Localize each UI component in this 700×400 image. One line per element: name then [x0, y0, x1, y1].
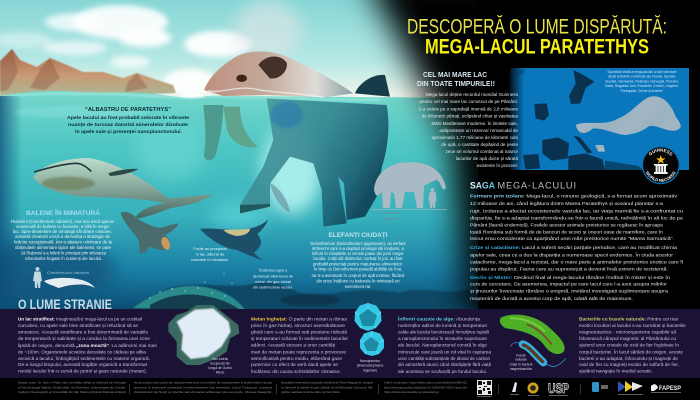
lake bed rocks: [133, 273, 480, 310]
text block: bacterii: bacterii s-au adaptat, înlocuindu-și magneții de: [579, 356, 678, 362]
text block: înfloriri: unor cantități substanțiale de dioxid de carbon: [398, 356, 490, 362]
illustration: magnetotactic bacteria: [500, 315, 566, 371]
text block: metan înghețat: gheții care s-au format sub presiune ridicată: [251, 330, 347, 336]
caption: methane release: din sedimentele lacului.: [253, 284, 293, 290]
mountains: [0, 49, 176, 97]
text block: cel mai mare lac: zece ori volumul combinat al tuturor: [445, 149, 518, 154]
text block: cel mai mare lac: CEL MAI MARE LAC: [423, 72, 487, 79]
text block: Balene în miniatură: nămolurilor bogate în nutrienți ale lacului.: [25, 256, 102, 261]
panel: strange world: [0, 309, 700, 378]
text block: Elefanți ciudați: eveniment rar.: [345, 284, 371, 289]
text block: metan înghețat: [250, 316, 348, 375]
callout: Albastru de Paratethys: [67, 107, 189, 135]
distant seal: [270, 183, 290, 213]
map note: [605, 70, 679, 93]
text block: Elefanți ciudați: Deinotherium (Deinotherium giganteum), un elefant: [310, 241, 406, 246]
text block: metan înghețat: adânci. Această stocare a unor cantități: [251, 343, 335, 349]
caption: seals: balenele în miniatură.: [191, 257, 229, 262]
dark fade to black: [362, 0, 700, 320]
footer credits: Despre autor: Dr. Dan V. Palcu este cercetător afiliat cu Institutul de Geologie: [18, 380, 126, 384]
text block: metan înghețat: mari de metan poate reprezenta o provocare: [251, 349, 346, 355]
text block: cel mai mare lac: existente în prezent.: [477, 163, 518, 168]
dark regions of the map: [569, 70, 594, 104]
text block: Elefanți ciudați: lacului. Colții săi distinctivi, curbați în jos, au fost: [313, 256, 403, 261]
heading: Saga mega-lacului: SAGA: [470, 180, 495, 190]
elephant head above water: [203, 51, 390, 97]
illustration: nanoplankton: Nanoplancton: [360, 359, 380, 363]
text block: Balene în miniatură: obișnuitele alimentare tipice ale balenelor, se pare: [15, 245, 112, 250]
map note: Italiei, Regatului Unit, României, Greciei, Ungariei,: [605, 84, 679, 88]
heading: O lume stranie: O LUME STRANIE: [18, 297, 112, 312]
caption: methane release: [253, 268, 293, 290]
text block: bacterii: exotici locuitori ai lacului s-au numărat și bacteriile: [579, 323, 686, 329]
illustration: nanoplankton: bigelowii): [363, 368, 377, 372]
callout: Albastru de Paratethys: “ALBASTRU DE PARATETHYS”: [85, 107, 171, 113]
text block: Elefanți ciudați: ELEFANȚI CIUDAȚI: [328, 233, 388, 239]
text block: metan înghețat: prins în gaz-hidrați, structuri asemănătoare: [251, 323, 345, 329]
text block: un lac stratificat: curcubeu, cu apele sale bine stratificate și refuzând să se: [18, 323, 138, 329]
scale comparison: human and small whale: [33, 267, 95, 288]
text block: cel mai mare lac: DIN TOATE TIMPURILE!!: [417, 81, 495, 88]
text block: Elefanți ciudați: din orice întâlnire cu balenele în miniatură un: [316, 278, 400, 284]
text block: Elefanți ciudați: [310, 233, 406, 289]
text block: un lac stratificat: nordul lacului într-o sursă de petrol și gaze naturale (metan).: [18, 368, 147, 374]
logos: partner institutions: FAPESP: [659, 385, 681, 392]
text block: Balene în miniatură: că Riabinini s-a hrănit în principal prin sifonarea: [21, 250, 107, 256]
text block: cel mai mare lac: Mega-lacul deține recordul mondial Guinness: [426, 92, 519, 97]
title: [407, 16, 667, 58]
image: gas hydrate: Mexic: [216, 370, 225, 374]
illustration: magnetotactic bacteria: (mai) în bacterii: [510, 362, 533, 366]
text block: un lac stratificat: [18, 316, 157, 374]
footer credits: grafice realizate la fel de către de Dan Palcu.: [281, 390, 341, 394]
text block: metan înghețat: încălzesc din cauza schimbărilor climatice.: [250, 369, 341, 375]
text block: un lac stratificat: de ~100m. Organismele acvatice decedate ce cădeau pe albia: [18, 349, 146, 355]
image: gas hydrate: [168, 305, 239, 374]
whale: [33, 158, 212, 219]
caption: seals: [191, 246, 229, 262]
QR code: [477, 380, 492, 397]
sky with clouds: [0, 0, 480, 100]
heading: Saga mega-lacului: MEGA-LACULUI: [498, 180, 576, 190]
badge: Guinness World Records: WORLD RECORDS: [646, 170, 676, 182]
text block: cel mai mare lac: S-a extins pe o suprafață imensă de 2,8 milioane: [418, 106, 518, 112]
text block: saga: populau au dispărut. Fauna care au supraviețuit a devenit însă extrem de rezistentă.: [470, 267, 668, 272]
text block: cel mai mare lac: pentru cel mai mare lac cunoscut de pe Pământ.: [419, 99, 518, 104]
caption: methane release: declanșat eliberarea de: [253, 274, 293, 278]
text block: bacterii: Bacteriile cu busole naturale: Printre cei mai: [579, 316, 678, 322]
text block: înfloriri: a nanoplanctonului în straturile superioare: [398, 336, 487, 342]
text block: cel mai mare lac: Mării Mediterane moderne. În limitele sale,: [431, 120, 518, 126]
text block: saga: rupt. Izolarea a afectat ecosistemele vastului lac, iar viața marină fie s-a confruntat cu: [470, 208, 683, 214]
callout: Albastru de Paratethys: Apele lacului au fost probabil colorate în vibrante: [67, 115, 189, 121]
scale comparison: Deinotherium and human: giganteum: [383, 217, 399, 221]
scale comparison: human and small whale: Cetotherium riabinini: [47, 271, 89, 275]
footer credits: anoxice în bazinele oceanice mediteraneene (de exemplu, Lacul Turkana), oceanul: [134, 386, 272, 390]
text block: saga: cataclisme, mega-lacul a rezistat, dar o mare parte a animalelor preistorice exotice care îl: [470, 260, 683, 265]
footer credits: cu balenele și rețelele de gaz utilizate de la Wikimedia Commons, Alte: [281, 386, 373, 390]
text block: saga: Crize și cataclisme: Lacul a suferit secări parțiale periodice, care au modificat chimia: [470, 245, 677, 251]
text block: un lac stratificat: anoxică a lacului, îmbogățind sedimentele cu materie organică.: [18, 356, 150, 362]
text block: Elefanți ciudați: probabil proiectați pentru mațuirarea alimentelor.: [313, 262, 403, 266]
footer credits: Institutul Oceanografic al Universității din São Paulo și Muzeul Național al Naturii: [18, 390, 126, 394]
text block: Balene în miniatură: hrănire excepțională. Într-o abatere uimitoare de la: [14, 240, 113, 244]
text block: bacterii: ajutând navigația în mediul acvatic.: [579, 368, 653, 374]
text block: saga: Formare prin izolare: Mega-lacul, o minune geologică, s-a format acum aproximativ: [470, 194, 678, 198]
text block: saga: moștenirii de durată a acestui corp de apă, odată atât de maiestuos.: [470, 296, 633, 301]
text block: metan înghețat: și temperaturi scăzute în sedimentele lacurilor: [251, 336, 348, 342]
illustration: magnetotactic bacteria: naturale: [515, 358, 527, 362]
logos: partner institutions: [510, 381, 681, 396]
seal 2: [200, 219, 268, 260]
text block: metan înghețat: semnificativă pentru mediu, eliberând gaze: [251, 356, 342, 362]
text block: Elefanți ciudați: rar s-a aventurat în corpuri de apă extinse, făcând: [312, 273, 405, 278]
caption: seals: Focile au prosperat: [193, 246, 228, 251]
text block: cel mai mare lac: de kilometri pătrați, eclipsând chiar și vastitatea: [422, 114, 518, 118]
text block: un lac stratificat: Un lac stratificat: Imaginează-ți mega-lacul ca pe un cocktail: [18, 316, 142, 322]
map note: decât teritoriile combinate ale Franței, Spaniei,: [608, 74, 676, 78]
text block: saga: și ținuturilor învecinate rămâne o enigmă, invitând investigații suplimentare asupra: [470, 288, 668, 293]
illustration: prehistoric lake scene: [0, 0, 700, 320]
seal 1: [121, 212, 179, 253]
callout: Albastru de Paratethys: în apele sale și prezenței nanoplanctonului.: [74, 129, 183, 135]
text block: cel mai mare lac: lacurilor de apă dulce și sărată: [456, 156, 518, 161]
caption: methane release: metan din gaz-hidrați: [255, 279, 291, 284]
text block: bacterii: corpul bacteriei. În lacul sărăcit de oxigen, aceste: [579, 348, 683, 355]
lake water: [0, 91, 480, 310]
text block: înfloriri: [397, 314, 491, 375]
text block: saga: curs de cercetare. De asemenea, impactul pe care lacul care l-a avut asupra mărilor: [470, 282, 667, 287]
text block: saga: dispariția, fie s-a adaptat transformându-se într-o faună unică, neîntâlnită în alt loc de pe: [470, 216, 683, 220]
text block: metan înghețat: puternice cu efect de seră dacă apele se: [251, 362, 338, 368]
badge: Guinness World Records: GUINNESS: [648, 148, 672, 156]
text block: saga: [470, 194, 683, 301]
text block: Balene în miniatură: lac. Spre deosebire de omologii săi dintre cetacee,: [13, 229, 112, 234]
text block: cel mai mare lac: aproximativ 1,77 milioane de kilometri cubi: [431, 135, 518, 140]
text block: Balene în miniatură: BALENE ÎN MINIATURĂ: [26, 209, 101, 217]
map note: Suprafața totală a mega-lacului a fost mai mare: [607, 70, 677, 74]
caption: seals: în lac, săturat de: [195, 252, 224, 256]
text block: saga: 12 milioane de ani, când legătura dintre Marea Paratethys și oceanul planetar s-a: [470, 201, 663, 206]
footer credits: Citiți în continuare: https://www.nature.com/articles/s41598-021: [384, 380, 467, 384]
text block: un lac stratificat: lipsită de oxigen, denumită „zona moartă”. La adâncimi mai mari: [18, 343, 157, 349]
text block: cel mai mare lac: [417, 72, 519, 168]
text block: înfloriri: din atmosferă atunci când rămășițele fără viață: [398, 362, 491, 368]
text block: saga: Pământ (faună endemică). Fosilele acestor animale preistorice se regăsesc în aproape: [470, 223, 663, 228]
text block: Elefanți ciudați: În timp ce Deinotherium posedă abilități de înot,: [313, 266, 402, 272]
logos: partner institutions: USP: [548, 381, 569, 396]
text block: bacterii: [579, 316, 686, 374]
Paratethys hatched area: [576, 96, 681, 152]
text block: Balene în miniatură: cunoscută de balene cu fanoane, a trăit în mega-: [16, 224, 111, 229]
badge: Guinness World Records: [642, 147, 680, 184]
illustration: nanoplankton: [354, 303, 384, 372]
image: gas hydrate: recuperați din: [210, 362, 230, 366]
light in the water: [0, 120, 322, 300]
map note: Suediei, Germaniei, Finlandei, Norvegiei, Poloniei,: [605, 80, 679, 84]
footer credits: și Geo-Ecologie Marină „GeoEcoMar” din România, Universitatea din Utrecht,: [18, 386, 126, 390]
text block: bacterii: oxid de fier cu magneți exotici de sulfură de fier,: [579, 362, 679, 368]
text block: înfloriri: Înfloriri cauzate de alge: Abundența: [397, 314, 480, 322]
text block: înfloriri: calde ale lacului favorizează înmulțirea rapidă: [398, 330, 489, 336]
callout: Albastru de Paratethys: nuanțe de turcoaz datorită mineralelor dizolvate: [68, 122, 188, 128]
mist beside the head: [234, 0, 302, 60]
text block: bacterii: folosească câmpul magnetic al Pământului cu: [579, 336, 676, 342]
text block: bacterii: ajutorul unor cristale de oxid de fier înglobate în: [579, 343, 679, 349]
text block: saga: Declin și Mister: Declinul final al mega-lacului rămâne învăluit în mister și este în: [470, 275, 670, 281]
text block: Balene în miniatură: această creatură unică a dezvoltat o strategie de: [15, 234, 111, 239]
text block: cel mai mare lac: adăpostește un rezervor remarcabil de: [439, 128, 518, 133]
text block: înfloriri: ale acestora se scufundă pe fundul lacului.: [398, 369, 487, 375]
text block: un lac stratificat: amestece. Această stratificare a fost determinată de variațiile: [18, 330, 148, 336]
water surface highlights: [0, 94, 380, 118]
text block: saga: apelor sale, ceea ce a dus la dispariția a numeroase specii endemice. În ciuda acestor: [470, 251, 673, 257]
footer credits: https://www.geosociety.org/articles/10.1130/GSAT-2023-impact-site: [384, 386, 467, 390]
footer credits: Acest proiect face parte din descoperirea unei noi metode de caracterizare a sedimentelor lacului: [134, 380, 272, 384]
map of Europe with Paratethys extent: [510, 68, 689, 170]
footer credits: [18, 380, 467, 394]
text block: înfloriri: nutrienților aditivi de lumină și temperaturi: [398, 323, 487, 329]
text block: bacterii: magnetotactice - microorganisme capabile să: [579, 330, 676, 336]
illustration: magnetotactic bacteria: busole: [516, 354, 526, 358]
text block: un lac stratificat: de temperatură și salinitate și a condus la formarea unei zone: [18, 336, 150, 342]
illustration: magnetotactic bacteria: magnetotactice: [510, 367, 532, 371]
map note: Portugaliei, Cehiei și Austriei.: [621, 89, 663, 93]
scale comparison: Deinotherium and human: [372, 162, 447, 221]
text block: un lac stratificat: De-a lungul timpului, această bogăție organică a transformat: [18, 362, 148, 368]
scale comparison: Deinotherium and human: Deinotherium: [381, 211, 401, 215]
text block: saga: trecut erau considerate ca aparținând unei mări preistorice numite “Marea Sarmatică”.: [470, 236, 674, 241]
giant elephant: Deinotherium: [203, 51, 390, 227]
text block: Elefanți ciudați: înflorit în mlaștinile și zonele joase din jurul mega-: [311, 251, 405, 256]
text block: saga: toată România sub formă de de bancuri de scoici și uneori oase de mamifere, care în: [470, 230, 663, 234]
text block: Elefanți ciudați: străvechi care s-a depășit omologii săi moderni, a: [312, 246, 405, 251]
text block: metan înghețat: Metan înghețat: O parte din metan a rămas: [251, 316, 348, 322]
footer credits: Atlanticului de Sud) și rolurile ale viruselor eliberate (de exemplu, Marea Neagră).: [134, 390, 272, 394]
text block: înfloriri: minuscule care joacă un rol vital în captarea: [398, 349, 491, 355]
caption: methane release: Încălzirea apei a: [258, 268, 288, 272]
footer credits: Ilustrațiile prezentând principalii rezidenți de Peter Magyaresi, imaginii: [281, 380, 373, 384]
illustration: nanoplankton: (Braarudosphaera: [357, 364, 383, 368]
text block: Balene în miniatură: [11, 209, 115, 261]
text block: înfloriri: ale lacului. Nanoplanctonul constă în alge: [398, 343, 487, 349]
image: gas hydrate: Gaz-hidrați: [212, 357, 228, 361]
text block: cel mai mare lac: de apă, o cantitate depășind de peste: [441, 142, 518, 147]
footer credits: https://www.sciencedaily.com/paratethys: [384, 390, 440, 394]
image: gas hydrate: lungul de Gurful: [208, 366, 232, 370]
text block: Balene în miniatură: Riabinini (Cetotherium riabinini), cea mai mică specie: [11, 219, 115, 224]
